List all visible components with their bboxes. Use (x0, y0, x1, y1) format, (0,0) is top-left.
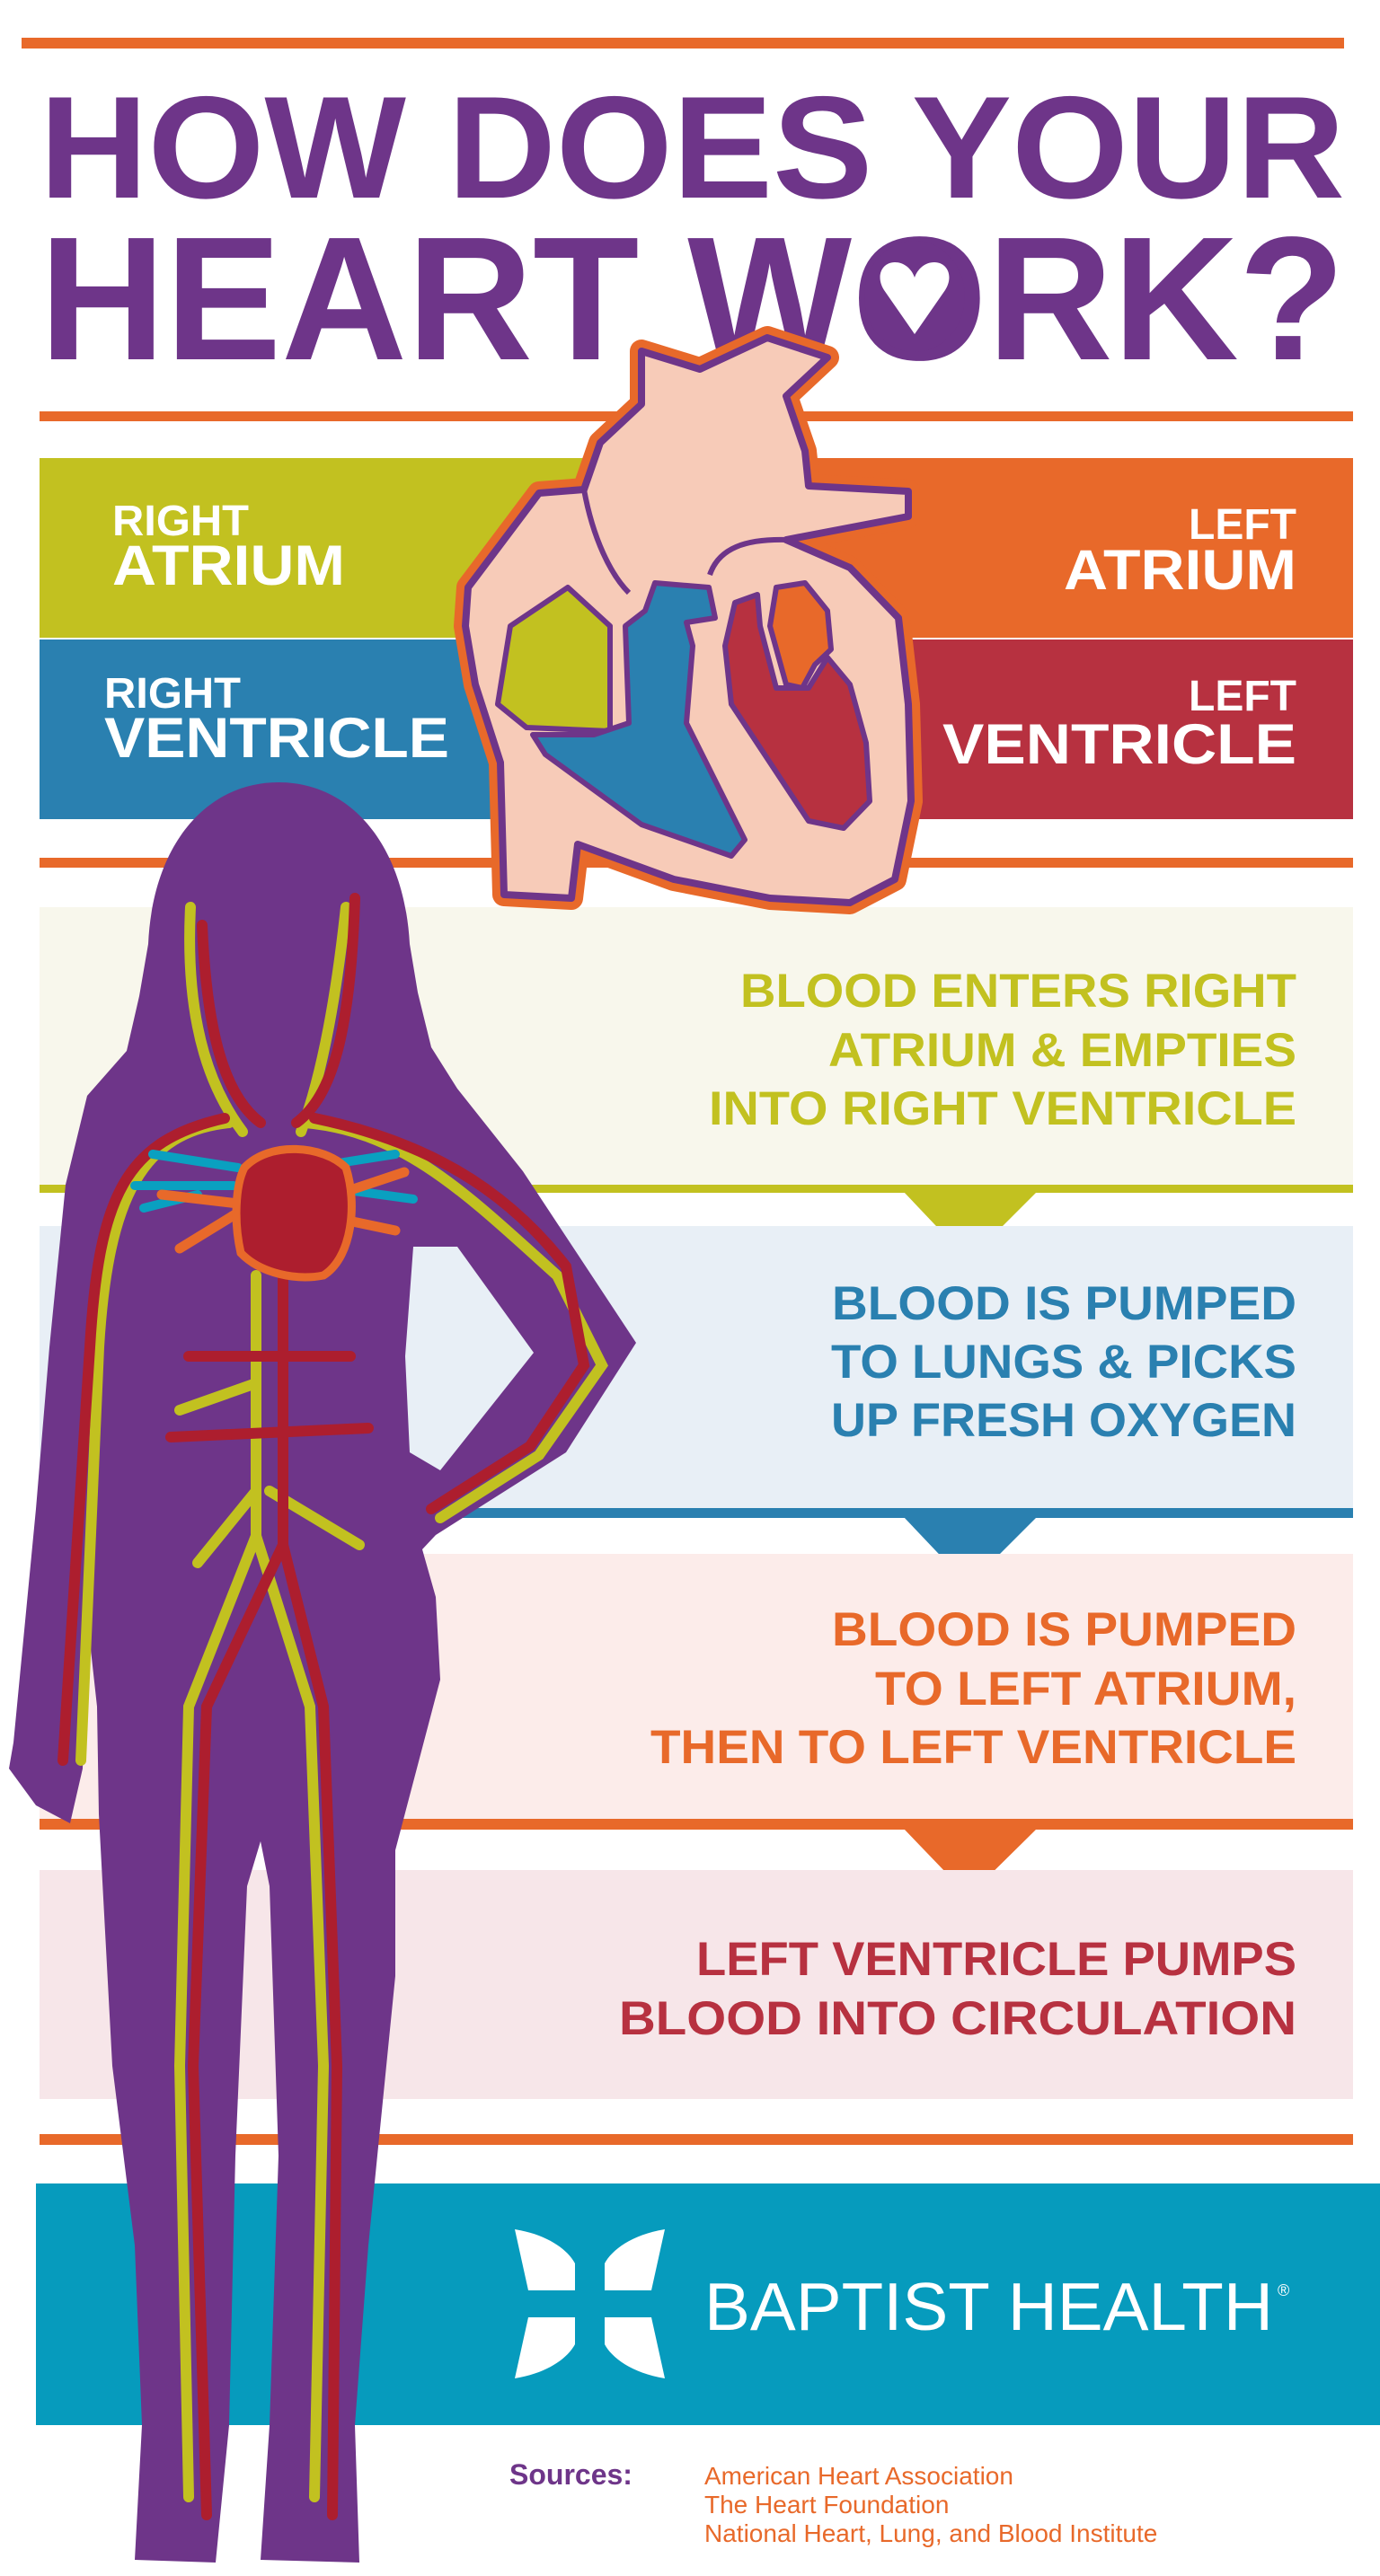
heart diagram (465, 338, 911, 903)
sources: American Heart Association (704, 2462, 1013, 2490)
panel: chamber labels: RIGHT (112, 498, 249, 545)
panel: step 3 (40, 1554, 1353, 1896)
panel: logo (36, 2183, 1380, 2425)
panel: step 1: INTO RIGHT VENTRICLE (709, 1082, 1296, 1135)
silhouette figure with vessels (9, 782, 636, 2563)
panel: chamber labels: LEFT (1189, 501, 1296, 549)
title: HOW DOES YOUR (40, 66, 1345, 229)
chamber: left ventricle (725, 595, 870, 828)
panel: chamber labels: ATRIUM (1064, 539, 1296, 602)
panel: chamber labels: VENTRICLE (104, 707, 449, 770)
icon: body heart (236, 1149, 351, 1277)
panel: chamber labels: ATRIUM (112, 534, 345, 597)
title: HEART WORK? (40, 200, 1345, 397)
panel: step 2: TO LUNGS & PICKS (831, 1336, 1296, 1389)
panel: step 1: BLOOD ENTERS RIGHT (740, 965, 1296, 1018)
chamber: right atrium (498, 587, 610, 731)
panel: logo: ® (1278, 2281, 1289, 2299)
sources (509, 2458, 1157, 2547)
panel: step 3: THEN TO LEFT VENTRICLE (650, 1721, 1296, 1774)
panel: step 4: BLOOD INTO CIRCULATION (619, 1992, 1296, 2045)
panel: step 4: LEFT VENTRICLE PUMPS (696, 1933, 1296, 1986)
panel: step 2: BLOOD IS PUMPED (832, 1277, 1296, 1330)
sources: Sources: (509, 2458, 632, 2491)
panel: step 4 (40, 1870, 1353, 2099)
panel: step 2: UP FRESH OXYGEN (831, 1394, 1296, 1447)
panel: step 1: ATRIUM & EMPTIES (828, 1024, 1296, 1077)
sources: National Heart, Lung, and Blood Institute (704, 2519, 1157, 2547)
chamber: left atrium (770, 583, 831, 688)
panel: step 3: BLOOD IS PUMPED (832, 1603, 1296, 1656)
title (40, 66, 1345, 397)
panel: step 1 (40, 907, 1353, 1260)
panel: chamber labels: LEFT (1189, 673, 1296, 720)
chamber: right ventricle (533, 583, 745, 856)
panel: chamber labels (40, 458, 1353, 819)
panel: chamber labels: RIGHT (104, 670, 241, 718)
icon: logo petals (515, 2229, 665, 2378)
icon: heart in O (864, 241, 965, 352)
panel: logo: BAPTIST HEALTH (704, 2269, 1273, 2344)
sources: The Heart Foundation (704, 2491, 949, 2519)
panel: step 2 (40, 1226, 1353, 1585)
panel: step 3: TO LEFT ATRIUM, (875, 1663, 1296, 1716)
panel: chamber labels: VENTRICLE (942, 713, 1296, 776)
